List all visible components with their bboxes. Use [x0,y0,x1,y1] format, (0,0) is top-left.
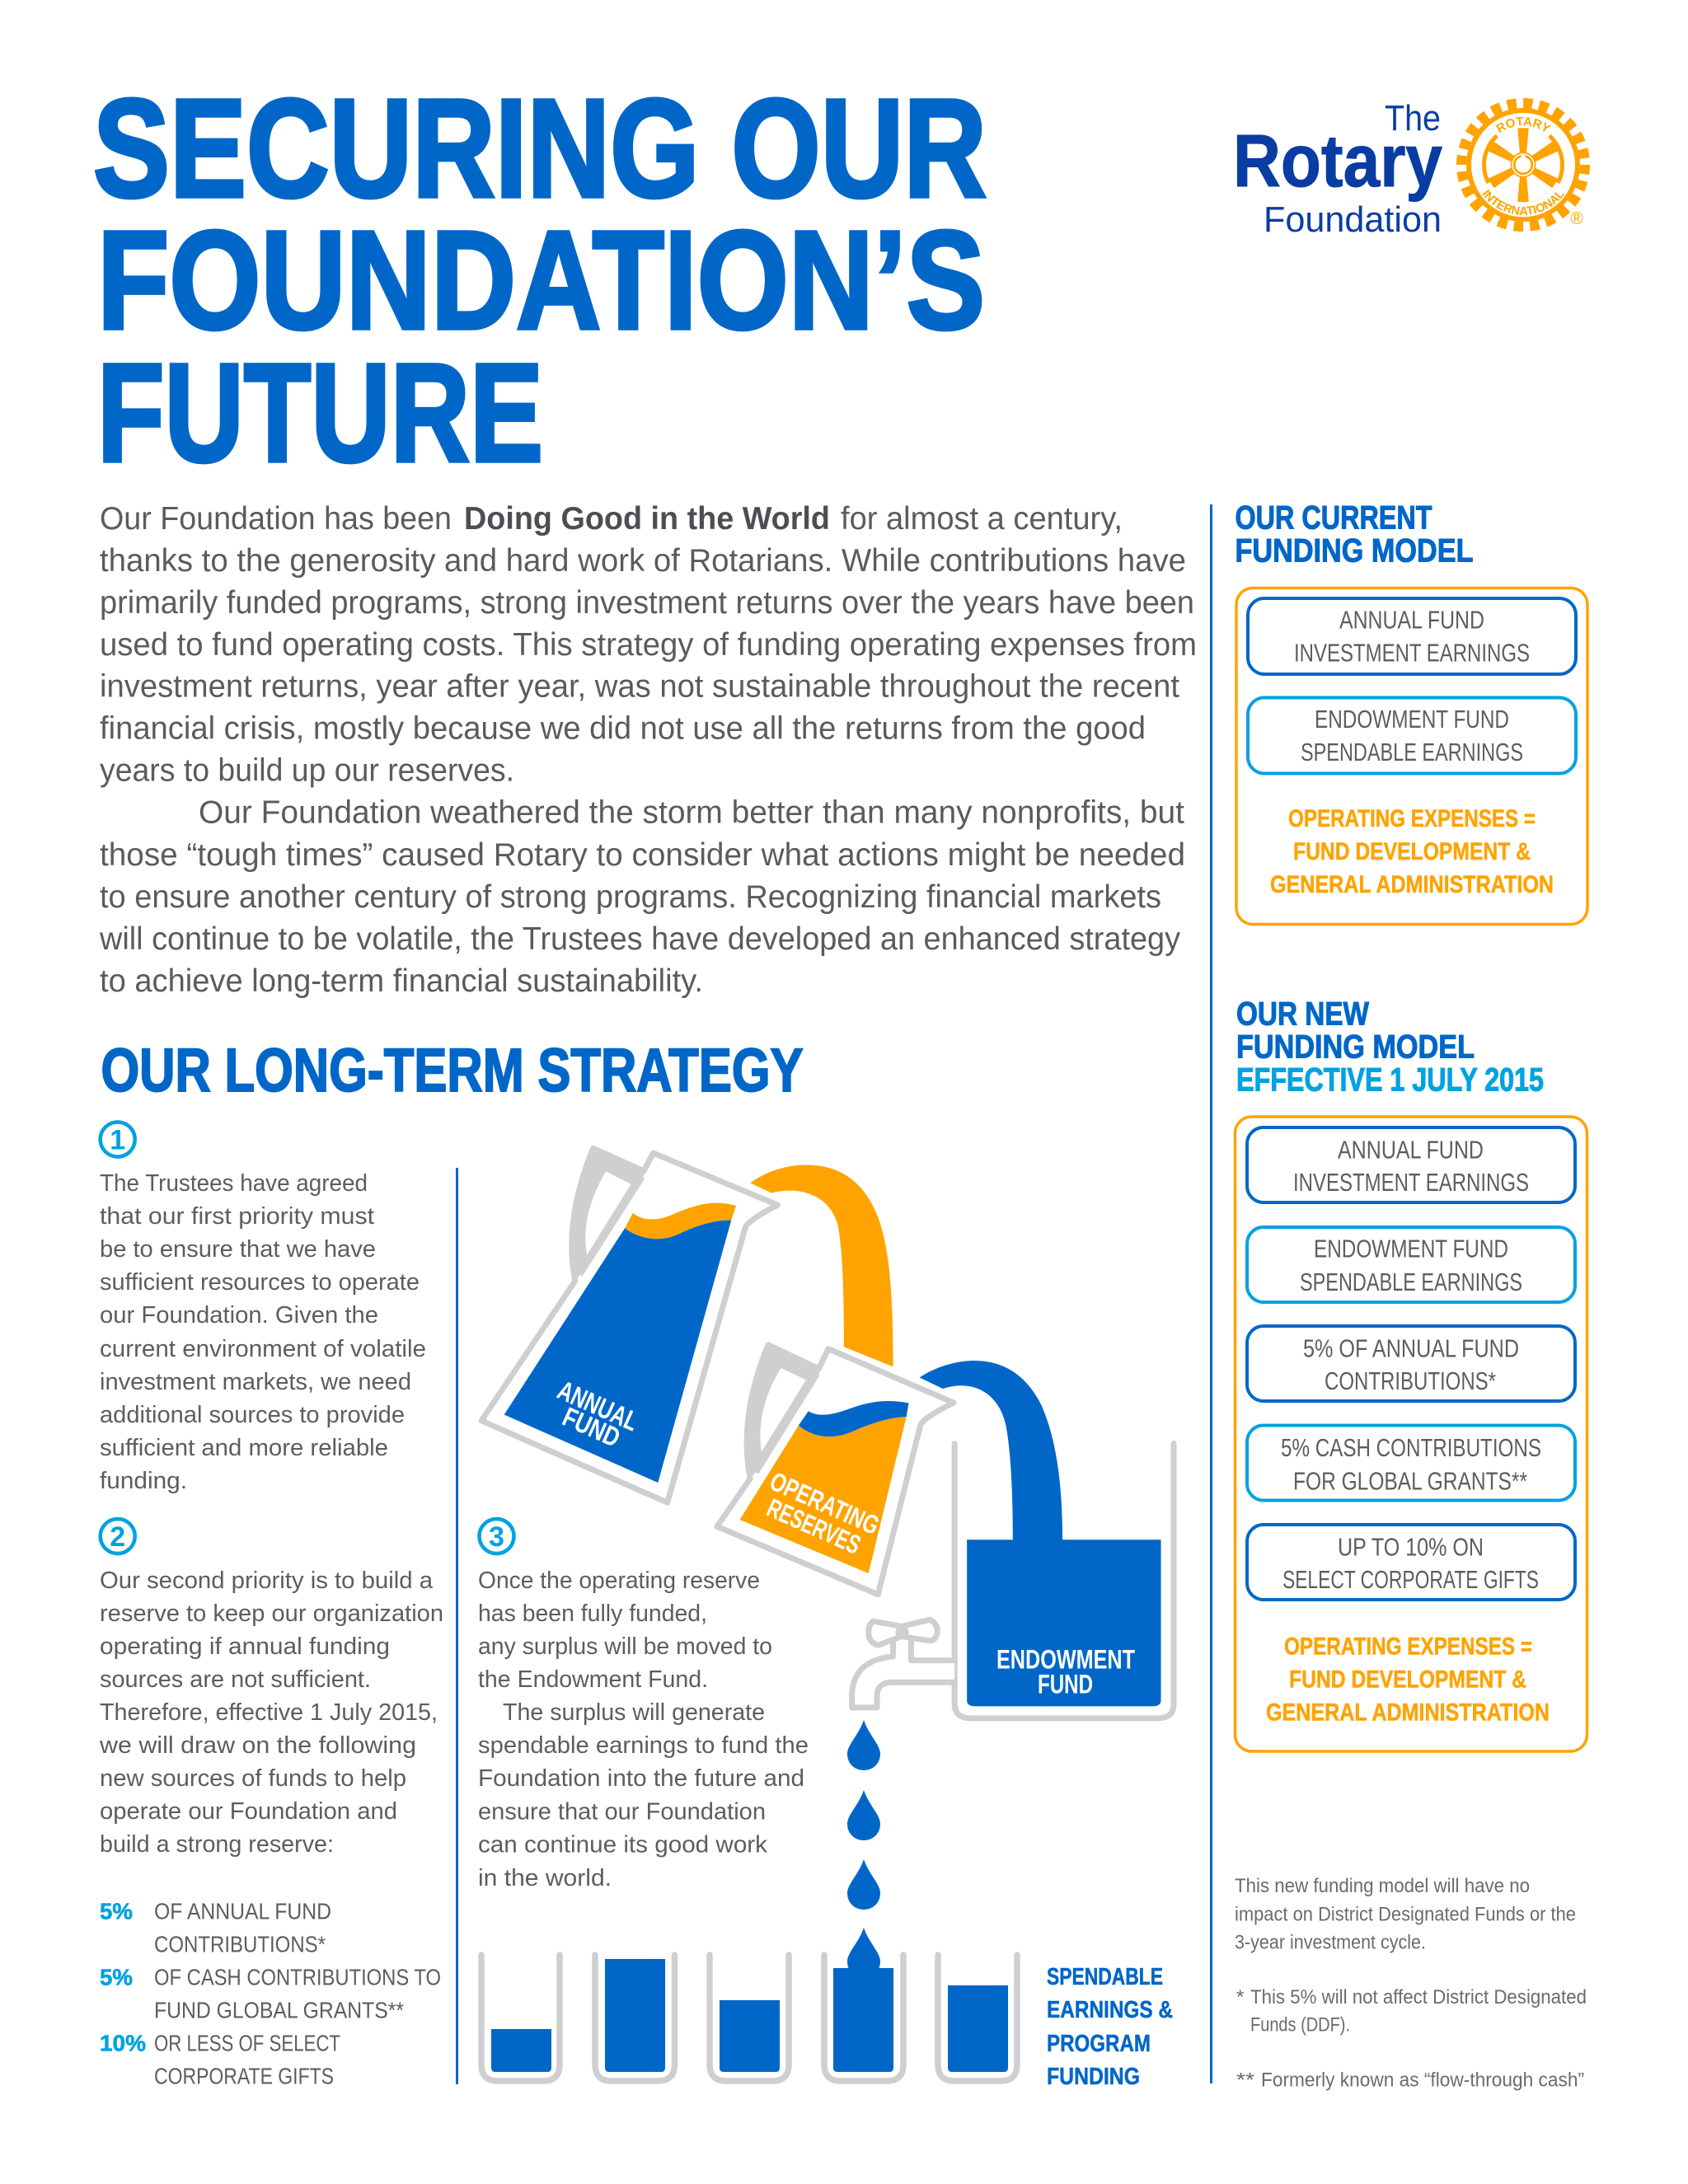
label: endowment fund [996,1645,1135,1699]
step 2 text: operate our Foundation and [100,1798,397,1825]
logo wordmark [1233,98,1442,240]
step 1 text: investment markets, we need [100,1369,411,1395]
step 1 text: sufficient resources to operate [100,1269,420,1296]
box: annual fund investment earnings [1248,598,1576,674]
icon: number 1 [101,1122,135,1157]
icon: number 1: 1 [110,1124,125,1155]
label: endowment fund: FUND [1038,1670,1093,1699]
percentage list: CORPORATE GIFTS [154,2064,334,2088]
step 2 text: build a strong reserve: [100,1831,334,1858]
step 3 text [478,1568,809,1891]
icon: operating reserves pitcher [717,1345,954,1595]
footnotes: * [1236,1986,1244,2008]
logo wordmark: Rotary [1233,120,1442,203]
icon: Rotary gear wheel: INTERNATIONAL [1482,190,1564,215]
percentage list: FUND GLOBAL GRANTS** [154,1998,404,2022]
step 2 text: reserve to keep our organization [100,1601,443,1627]
step 3 text: the Endowment Fund. [478,1666,708,1693]
footnotes: impact on District Designated Funds or the [1235,1904,1576,1925]
heading: our current funding model: FUNDING MODEL [1235,532,1474,569]
callout: operating expenses: GENERAL ADMINISTRATION [1270,871,1554,898]
box: endowment fund spendable earnings [1248,697,1576,773]
step 2 text: Our second priority is to build a [100,1568,434,1594]
step 3 text: has been fully funded, [478,1601,707,1627]
intro text: primarily funded programs, strong investment returns over the years have been [100,585,1194,621]
box: up to 10% on select corporate gifts: UP TO 10% ON [1338,1533,1484,1561]
heading: our long-term strategy: OUR LONG-TERM STRATEGY [101,1036,803,1104]
icon: number 2 [101,1519,135,1554]
box: 5% cash contributions for global grants: 5% CASH CONTRIBUTIONS [1281,1433,1541,1462]
divider: right column rule [1210,504,1212,2083]
percentage list [100,1899,441,2088]
logo: The Rotary Foundation [1233,98,1590,240]
intro text: to ensure another century of strong programs. Recognizing financial markets [100,879,1161,915]
title: SECURING OUR [93,71,987,227]
panel: step 2 [99,1519,443,2088]
step 1 text: be to ensure that we have [100,1236,376,1263]
step 2 text: Therefore, effective 1 July 2015, [100,1699,438,1726]
step 1 text: that our first priority must [100,1203,374,1230]
beaker 3 [710,1955,789,2081]
intro text: thanks to the generosity and hard work of Rotarians. While contributions have [100,543,1186,579]
callout: operating expenses [1270,805,1554,898]
step 1 text: funding. [100,1468,187,1494]
heading: our new funding model: EFFECTIVE 1 JULY 2015 [1236,1062,1544,1098]
callout: operating expenses: OPERATING EXPENSES = [1288,805,1536,832]
footnotes [1235,1875,1587,2092]
percentage list: 10% [100,2031,146,2055]
label: spendable earnings and program funding: SPENDABLE [1047,1964,1163,1990]
icon: number 3: 3 [489,1521,504,1553]
icon: number 2: 2 [110,1521,125,1553]
intro text: Doing Good in the World [464,501,830,537]
intro text: financial crisis, mostly because we did not use all the returns from the good [100,710,1146,747]
percentage list: 5% [100,1899,133,1924]
heading: our current funding model [1235,499,1474,569]
step 3 text: Foundation into the future and [478,1765,804,1792]
step 3 text: The surplus will generate [503,1699,765,1726]
step 2 text: operating if annual funding [100,1633,390,1660]
box: annual fund investment earnings: ANNUAL FUND [1339,605,1484,635]
label: spendable earnings and program funding [1047,1964,1173,2090]
step 1 text: our Foundation. Given the [100,1302,378,1329]
label: spendable earnings and program funding: FUNDING [1047,2064,1140,2090]
label: endowment fund: ENDOWMENT [996,1645,1135,1675]
box: endowment fund spendable earnings: SPENDABLE EARNINGS [1301,738,1523,766]
arrow: blue stream into endowment fund [920,1361,1062,1540]
intro text: Our Foundation has been [100,501,452,537]
box: annual fund investment earnings: ANNUAL FUND [1338,1136,1484,1164]
panel: step 1 [100,1122,426,1494]
percentage list: OF ANNUAL FUND [154,1899,331,1924]
intro text: to achieve long-term financial sustainability. [100,963,703,999]
title: FOUNDATION’S [97,203,985,359]
intro text: years to build up our reserves. [100,753,514,788]
heading: our new funding model: OUR NEW [1236,996,1370,1032]
step 3 text: can continue its good work [478,1831,768,1858]
footnotes: 3-year investment cycle. [1235,1932,1426,1953]
step 1 text: additional sources to provide [100,1402,405,1428]
beaker 5 [938,1955,1017,2081]
chart: spendable earnings beakers [481,1955,1017,2081]
box: annual fund investment earnings: INVESTMENT EARNINGS [1294,638,1530,668]
box: up to 10% on select corporate gifts: SELECT CORPORATE GIFTS [1282,1565,1539,1594]
step 1 text: sufficient and more reliable [100,1435,388,1461]
icon: annual fund pitcher [481,1148,777,1502]
intro text: will continue to be volatile, the Trustees have developed an enhanced strategy [99,921,1180,957]
footnotes: Formerly known as “flow-through cash” [1261,2069,1584,2092]
footnotes: This 5% will not affect District Designated [1250,1986,1587,2008]
diagram: pitchers, reserves and endowment tank [481,1148,1174,1718]
title [93,71,987,491]
footnotes: This new funding model will have no [1235,1875,1530,1897]
box: endowment fund spendable earnings: ENDOWMENT FUND [1314,1235,1508,1263]
intro text: Our Foundation weathered the storm better than many nonprofits, but [199,794,1184,831]
step 3 panel [478,1519,809,1891]
title: FUTURE [97,335,543,491]
step 3 text: any surplus will be moved to [478,1633,772,1660]
icon: number 3 [480,1519,514,1554]
step 1 text [100,1170,426,1494]
box: endowment fund spendable earnings: SPENDABLE EARNINGS [1300,1268,1522,1296]
intro text [99,501,1197,999]
callout: operating expenses: GENERAL ADMINISTRATION [1266,1699,1550,1726]
box: 5% of annual fund contributions [1247,1326,1575,1401]
label: annual fund: FUND [558,1401,625,1453]
logo wordmark: The [1385,98,1441,138]
callout: operating expenses [1266,1633,1550,1726]
label: spendable earnings and program funding: PROGRAM [1047,2031,1151,2057]
icon: Rotary gear wheel: ROTARY [1495,117,1551,134]
footnotes: Funds (DDF). [1250,2014,1350,2036]
icon: Rotary gear wheel: ® [1570,209,1583,228]
step 3 text: spendable earnings to fund the [478,1732,809,1759]
icon: faucet [852,1619,954,1708]
icon: endowment tank [954,1443,1174,1718]
box: endowment fund spendable earnings: ENDOWMENT FUND [1315,705,1509,733]
callout: operating expenses: OPERATING EXPENSES = [1284,1633,1532,1660]
heading: our new funding model [1236,996,1544,1098]
step 1 text: The Trustees have agreed [100,1170,368,1197]
intro text: investment returns, year after year, was not sustainable throughout the recent [100,669,1179,704]
logo wordmark: Foundation [1264,199,1442,240]
label: operating reserves: RESERVES [762,1493,865,1560]
label: annual fund: ANNUAL [553,1375,643,1436]
intro text: for almost a century, [841,501,1123,537]
box: 5% cash contributions for global grants: FOR GLOBAL GRANTS** [1293,1467,1527,1495]
step 1 text: current environment of volatile [100,1336,426,1362]
icon: water drops [847,1720,880,1978]
step 2 text: sources are not sufficient. [100,1666,371,1693]
icon: Rotary gear wheel [1456,98,1590,232]
step 2 text [99,1568,443,1858]
intro text: those “tough times” caused Rotary to consider what actions might be needed [100,837,1185,873]
step 2 text: new sources of funds to help [100,1765,406,1792]
panel: current funding model [1236,588,1587,925]
percentage list: OR LESS OF SELECT [154,2031,340,2055]
box: 5% cash contributions for global grants [1247,1426,1575,1500]
box: up to 10% on select corporate gifts [1247,1525,1575,1600]
box: endowment fund spendable earnings [1247,1227,1575,1302]
divider: left column rule [456,1168,458,2084]
step 2 text: we will draw on the following [99,1732,416,1759]
label: operating reserves: OPERATING [766,1466,884,1540]
beaker 4 [824,1955,903,2081]
box: 5% of annual fund contributions: CONTRIBUTIONS* [1325,1366,1496,1395]
callout: operating expenses: FUND DEVELOPMENT & [1293,838,1531,865]
footnotes: ** [1236,2069,1254,2092]
step 3 text: ensure that our Foundation [478,1798,766,1825]
box: annual fund investment earnings: INVESTMENT EARNINGS [1293,1168,1529,1197]
heading: our current funding model: OUR CURRENT [1235,499,1432,536]
arrow: orange stream into operating reserves [750,1165,893,1366]
panel: new funding model [1235,1117,1587,1751]
intro text: used to fund operating costs. This strategy of funding operating expenses from [100,627,1197,663]
box: annual fund investment earnings [1247,1127,1575,1202]
percentage list: 5% [100,1965,133,1990]
box: 5% of annual fund contributions: 5% OF ANNUAL FUND [1303,1333,1519,1363]
percentage list: CONTRIBUTIONS* [154,1932,326,1957]
beaker 1 [481,1955,560,2081]
callout: operating expenses: FUND DEVELOPMENT & [1289,1666,1526,1693]
step 3 text: in the world. [478,1865,612,1891]
heading: our new funding model: FUNDING MODEL [1236,1029,1475,1065]
percentage list: OF CASH CONTRIBUTIONS TO [154,1965,441,1990]
label: spendable earnings and program funding: EARNINGS & [1047,1997,1173,2023]
step 3 text: Once the operating reserve [478,1568,760,1594]
beaker 2 [595,1955,674,2081]
